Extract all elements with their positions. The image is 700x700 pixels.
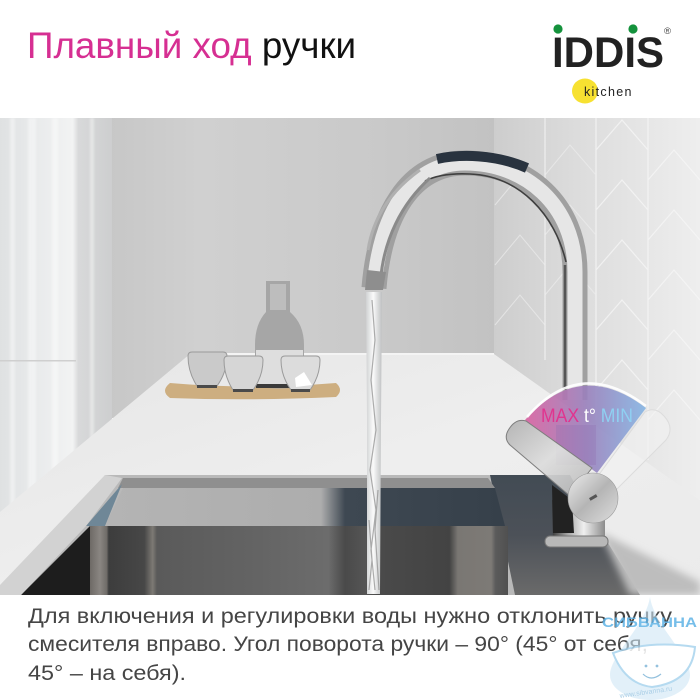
watermark: Сибванна [602, 597, 697, 700]
countertop [0, 354, 700, 595]
wooden tray [165, 383, 340, 399]
sink [0, 475, 700, 595]
watermark bathtub [613, 645, 695, 687]
sink back wall [199, 488, 505, 526]
watermark face [643, 665, 661, 678]
fan arc highlight [527, 383, 646, 417]
logo registered mark: ® [664, 26, 671, 37]
glass middle [224, 356, 263, 390]
faucet handle [506, 420, 618, 523]
description line 1: Для включения и регулировки воды нужно отклонить ручку [28, 604, 672, 628]
logo wordmark: IDDIS [552, 29, 664, 77]
logo: IDDIS kitchen [552, 24, 671, 103]
faucet stem behind fan [556, 425, 596, 465]
faucet spout [365, 156, 575, 400]
water stream [366, 292, 382, 594]
sink front wall [90, 526, 508, 595]
handle ball [568, 473, 618, 523]
description text [28, 604, 672, 685]
sink left slope [86, 484, 122, 526]
kitchen photo [0, 118, 700, 595]
faucet body [552, 500, 605, 540]
watermark name: СИБВАННА [602, 614, 697, 630]
countertop back edge [226, 353, 494, 355]
carafe [255, 281, 304, 388]
curtain window [0, 118, 112, 518]
handle lever [506, 420, 592, 496]
temperature fan [525, 383, 646, 473]
serving tray with carafe and glasses [165, 281, 340, 399]
label: MAX t MIN: MAX t° MIN [541, 406, 633, 427]
faucet base [545, 485, 608, 547]
description line 2: смесителя вправо. Угол поворота ручки – 90° (45° от себя, [28, 632, 648, 656]
watermark url: www.sibvanna.ru [618, 686, 673, 700]
description line 3: 45° – на себя). [28, 661, 186, 685]
logo yellow spot [572, 78, 598, 104]
title: Плавный ход ручки [27, 25, 356, 66]
wall [100, 118, 500, 418]
ghost handle position [600, 410, 670, 490]
countertop edge [0, 475, 122, 595]
glass right [281, 356, 320, 390]
sink inner rim [118, 478, 495, 488]
sink right side [490, 475, 640, 595]
glass left [188, 352, 227, 386]
fan sector [525, 386, 646, 473]
sink dark corner [21, 526, 90, 595]
base flange [545, 536, 608, 547]
tiled wall [494, 118, 700, 500]
sink opening [21, 475, 520, 595]
logo green dots [553, 24, 638, 34]
watermark drop [610, 597, 690, 700]
handle brand mark [589, 494, 597, 501]
logo kitchen label: kitchen [584, 85, 633, 99]
lower counter shadow [600, 532, 700, 595]
